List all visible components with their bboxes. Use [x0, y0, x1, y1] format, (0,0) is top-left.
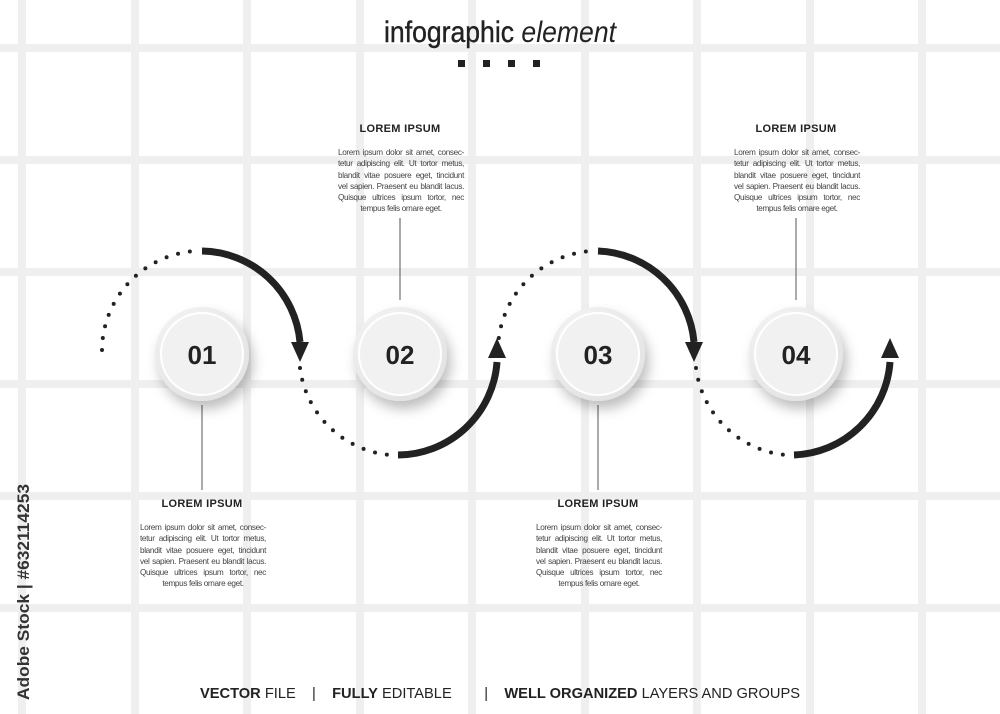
text block 03: blandit vitae posuere eget, tincidunt [536, 546, 662, 555]
text block 01: Quisque ultrices ipsum tortor, nec [140, 568, 266, 577]
text block 03: Lorem ipsum dolor sit amet, consec- [536, 523, 662, 532]
circle 03: 03 [584, 340, 612, 370]
connector lines [202, 218, 796, 490]
text block 04: tempus felis ornare eget. [756, 204, 838, 213]
text block 02: LOREM IPSUM [360, 123, 440, 135]
text block 01: tetur adipiscing elit. Ut tortor metus, [140, 534, 266, 543]
text block 01: blandit vitae posuere eget, tincidunt [140, 546, 266, 555]
text block 04: tetur adipiscing elit. Ut tortor metus, [734, 159, 860, 168]
title dots [458, 60, 540, 67]
circle 03 [551, 307, 645, 401]
circle 01: 01 [188, 340, 216, 370]
text block 04: Lorem ipsum dolor sit amet, consec- [734, 148, 860, 157]
text block 01: tempus felis ornare eget. [162, 579, 244, 588]
text block 01: Lorem ipsum dolor sit amet, consec- [140, 523, 266, 532]
circle 02: 02 [386, 340, 414, 370]
text block 03: LOREM IPSUM [558, 498, 638, 510]
text block 02: vel sapien. Praesent eu blandit lacus. [338, 182, 464, 191]
text block 01: vel sapien. Praesent eu blandit lacus. [140, 557, 266, 566]
text block 04: blandit vitae posuere eget, tincidunt [734, 171, 860, 180]
footer: VECTOR FILE | FULLY EDITABLE | WELL ORGANIZED LAYERS AND GROUPS [200, 685, 800, 702]
arrow 2 [300, 338, 506, 455]
text block 02: tetur adipiscing elit. Ut tortor metus, [338, 159, 464, 168]
title: infographic element [384, 16, 617, 49]
text block 03: vel sapien. Praesent eu blandit lacus. [536, 557, 662, 566]
text block 03: Quisque ultrices ipsum tortor, nec [536, 568, 662, 577]
circle 04: 04 [782, 340, 811, 370]
text block 03 [536, 498, 662, 588]
circle 04 [749, 307, 843, 401]
text block 03: tempus felis ornare eget. [558, 579, 640, 588]
text block 01 [140, 498, 266, 588]
text block 02 [338, 123, 464, 213]
arrow 4 [696, 338, 899, 455]
text block 04: LOREM IPSUM [756, 123, 836, 135]
text block 04: vel sapien. Praesent eu blandit lacus. [734, 182, 860, 191]
text block 02: blandit vitae posuere eget, tincidunt [338, 171, 464, 180]
text block 01: LOREM IPSUM [162, 498, 242, 510]
arrow 1 [102, 251, 309, 362]
side watermark text: Adobe Stock | #632114253 [14, 484, 33, 700]
text block 02: Quisque ultrices ipsum tortor, nec [338, 193, 464, 202]
circle 01 [155, 307, 249, 401]
circle 02 [353, 307, 447, 401]
arrow 3 [498, 251, 703, 362]
text block 04: Quisque ultrices ipsum tortor, nec [734, 193, 860, 202]
text block 04 [734, 123, 860, 213]
text block 02: tempus felis ornare eget. [360, 204, 442, 213]
text block 02: Lorem ipsum dolor sit amet, consec- [338, 148, 464, 157]
text block 03: tetur adipiscing elit. Ut tortor metus, [536, 534, 662, 543]
